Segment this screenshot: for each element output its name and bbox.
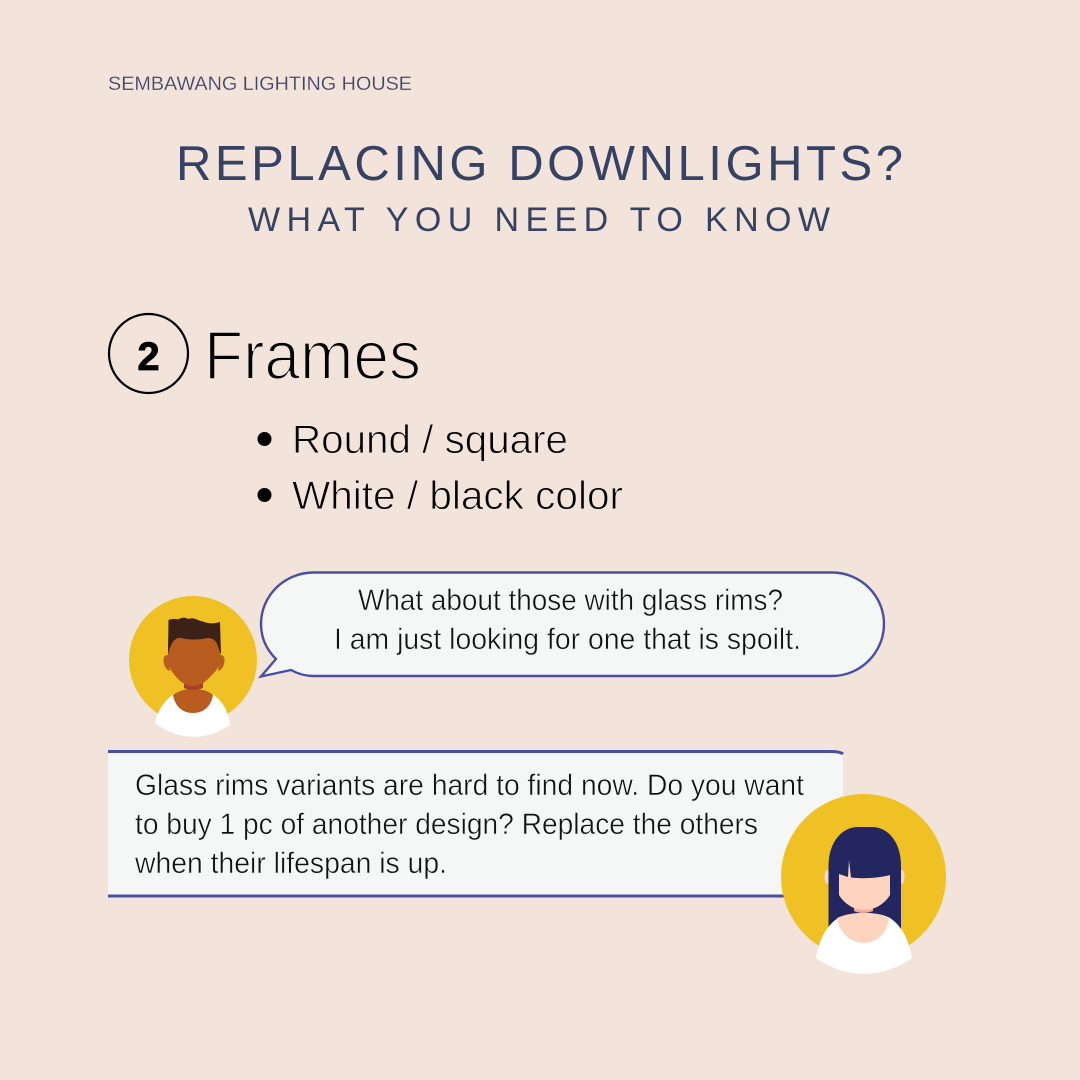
number badge [109, 314, 188, 393]
section heading: Frames [204, 317, 421, 394]
number badge: 2 [137, 335, 160, 379]
title: REPLACING DOWNLIGHTS? [176, 137, 903, 191]
avatar: woman [781, 794, 946, 974]
reply text: Glass rims variants are hard to find now. Do you want [135, 769, 804, 802]
reply box [108, 751, 843, 897]
reply text: to buy 1 pc of another design? Replace the others [135, 808, 758, 841]
speech bubble: customer [261, 572, 884, 676]
subtitle: WHAT YOU NEED TO KNOW [248, 201, 830, 239]
reply text: when their lifespan is up. [134, 847, 447, 880]
bullet list: White / black color [292, 474, 623, 518]
bullet list [258, 418, 623, 518]
avatar: man [129, 596, 257, 737]
customer question text [334, 584, 801, 656]
customer question text: What about those with glass rims? [358, 584, 783, 617]
bullet list: Round / square [292, 418, 568, 462]
brand label: SEMBAWANG LIGHTING HOUSE [108, 74, 412, 95]
reply text [134, 769, 804, 880]
customer question text: I am just looking for one that is spoilt. [334, 623, 801, 656]
